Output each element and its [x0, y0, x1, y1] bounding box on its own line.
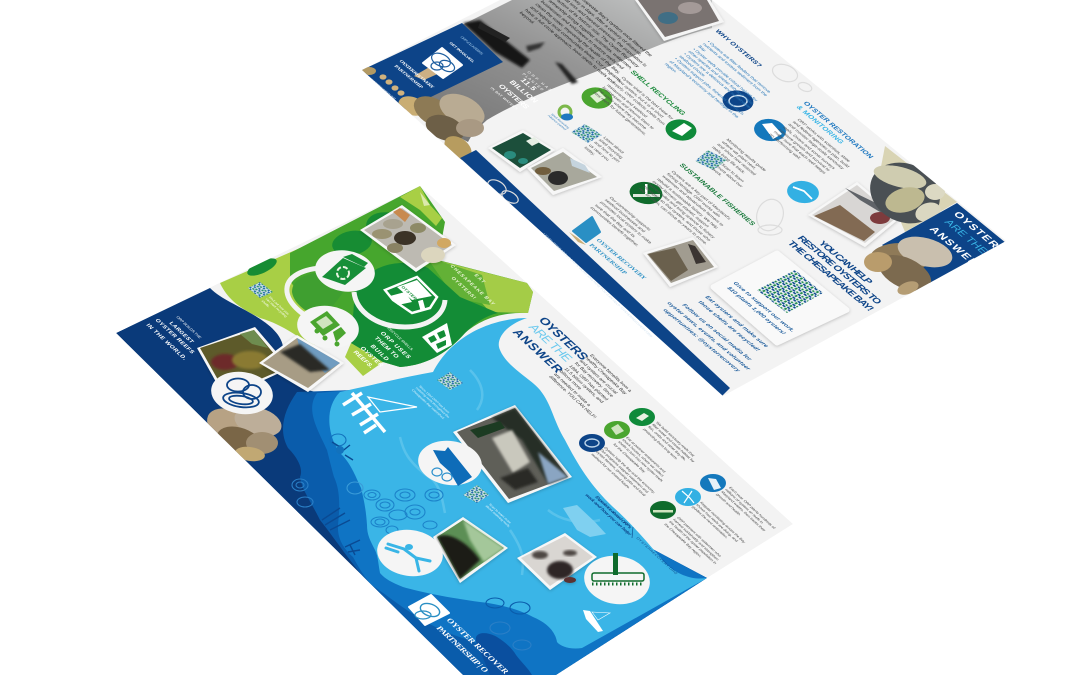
ghost boat silhouette	[563, 505, 606, 537]
icon: shop: OYSTERS	[400, 285, 421, 302]
photo: fishermen	[643, 237, 718, 287]
caption: recycle shells: OYSTER	[358, 346, 385, 368]
dark green tree patches	[247, 212, 390, 276]
logo text on navy panel: OYSTER RECOVERY	[397, 60, 435, 90]
caption small near QR: Scan to learn more about restoring reefs.	[484, 503, 512, 528]
navy panel left	[362, 23, 503, 110]
small info circles	[579, 408, 726, 519]
body text: intro left brochure: for Bay recovery. Since	[573, 362, 614, 398]
why oysters bullets	[664, 40, 772, 118]
QR shell recycling	[571, 124, 602, 143]
dark green circle region	[351, 263, 498, 367]
caption: eat oysters: CHESAPEAKE BAY	[448, 264, 497, 307]
white boat silhouette	[583, 610, 610, 632]
icon: boat blue circle	[754, 118, 786, 142]
heading: you can help: THE CHESAPEAKE BAY!	[785, 240, 876, 313]
lime land	[220, 248, 315, 345]
cover title	[927, 210, 1008, 268]
call to action text: $10 plants 1,000 oysters!	[725, 286, 787, 336]
body text: intro left brochure: Everyone benefits from a	[588, 354, 632, 393]
logo text on navy panel: oysterrecovery.org	[369, 78, 397, 100]
planted stat: OYSTERS	[496, 83, 531, 110]
title: oysters are the answer: ANSWER	[509, 327, 566, 375]
circle: truck	[294, 302, 362, 352]
lime and pale corner shapes	[400, 186, 533, 313]
caption: recycle shells: RECYCLE SHELLS.	[386, 327, 415, 351]
heading: you can help: YOU CAN HELP	[816, 240, 875, 286]
photo: work boat	[453, 405, 572, 503]
body text: aquaculture: Oysters help the Bay and the economy. Our programs support watermen and oyster farmers, growing jobs and local seafood for our shared future.	[591, 446, 657, 497]
caption small on lime: Find out how you can start recycling shells.	[261, 296, 290, 318]
body text: restaurants: Eat at partner restaurants and shuck houses, where we collect shells to turn into new oyster reefs for the Chesapeake Bay.	[613, 436, 667, 482]
body text: intro left brochure	[547, 354, 632, 419]
call to action text: Follow us on social media for	[680, 303, 753, 362]
fisheries QR caption: Scan to learn more about our work.	[711, 163, 745, 188]
fisheries text: Oysters are a key part of Maryland's fishing heritage. ORP works with watermen and aquaculture farmers to rebuild a sustainable fishery. We help oyster farmers get started, support harvest rules and bring science to fishery managers so that oysters, and those who rely on them, can thrive for years to come.	[637, 170, 732, 245]
shell recycling logo	[559, 106, 573, 120]
body text: intro left brochure: are needed to make a	[552, 373, 591, 407]
photo: shell pile	[808, 182, 900, 247]
photo: shell planting machine	[259, 335, 344, 392]
circle: diver	[374, 526, 446, 580]
blue layer	[312, 390, 707, 675]
photo: diver under water	[433, 517, 508, 583]
mid blue layer	[283, 390, 707, 675]
green land	[290, 186, 533, 367]
oyster pile on cover	[864, 236, 952, 295]
oyster line drawings	[292, 434, 531, 650]
call to action text: Give to support our work.	[731, 281, 796, 333]
body text: divers: Regular monitoring across the Bay shows how reefs are doing, and guides the next restoration.	[691, 501, 747, 544]
title: oysters are the answer: ARE THE	[525, 322, 576, 364]
body text: intro left brochure: 1994, ORP has planted	[568, 365, 609, 401]
photo: oyster platter	[360, 205, 456, 272]
lime patch bottom of green	[345, 343, 383, 376]
why oysters bullets: • Oysters are filter feeders that remove nutrients and excess sediment from the Bay.	[697, 40, 772, 97]
logo text on navy panel: PARTNERSHIP	[392, 65, 423, 89]
body text: intro left brochure: difference. YOU CAN HELP!	[547, 376, 596, 419]
heading: you can help: RESTORE OYSTERS TO	[795, 235, 884, 306]
heading: sustainable fisheries: SUSTAINABLE FISHERIES	[677, 163, 756, 227]
dark lobe bottom	[476, 633, 532, 675]
icon: truck circle	[582, 87, 612, 109]
planted stat: BILLION	[507, 79, 540, 104]
circle: rake	[581, 552, 653, 608]
photo: reef	[197, 327, 290, 398]
planted stat	[489, 71, 553, 111]
circle: recycling bin	[312, 247, 378, 295]
heading: why oysters: WHY OYSTERS?	[713, 29, 763, 68]
caption: recycle shells: BUILD	[368, 344, 391, 362]
logo text at fold: OYSTER RECOVERY	[594, 238, 648, 281]
ring arc left	[284, 266, 316, 316]
body text: intro left brochure: billions more	[557, 370, 581, 391]
caption: recycle shells: REEFS.	[351, 350, 375, 369]
get involved: GET INVOLVED.	[448, 41, 476, 63]
call to action text: oyster news, events, and volunteer	[665, 301, 752, 372]
icon: rake circle	[630, 182, 662, 204]
photo: green tanks	[488, 130, 555, 172]
body text: intro left brochure: 11.5 billion oysters, and	[562, 367, 604, 404]
restoration lower text: Monitoring results guide where we plant next, and show how restored reefs bring life back.	[711, 138, 767, 176]
navy cover panel	[882, 203, 1006, 283]
divider at url	[632, 527, 633, 538]
cover title: ARE THE	[942, 218, 990, 255]
caption: largest oyster reefs: IN THE WORLD.	[144, 323, 188, 361]
caption: recycle shells: ORP USES	[378, 331, 412, 360]
contact callout: Experience aboard ORP's	[594, 495, 633, 530]
icon: shop	[385, 277, 437, 313]
caption: eat oysters: OYSTERS!	[449, 276, 477, 300]
icon: oyster navy circle	[722, 90, 754, 112]
QR card	[713, 253, 847, 343]
body text: sanctuary reefs: We build sanctuary reefs that filter water and create habitat for fish, crabs and other Bay life, protecting them long term.	[643, 421, 696, 463]
why oysters bullets: • Oysters are a delicious and sustainable seafood choice.	[678, 52, 752, 109]
faint oyster outlines	[485, 61, 813, 235]
left brochure: outside panels	[116, 186, 793, 675]
strip text: LEARN MORE ABOUT ORP'S WORK AND HOW YOU CAN HELP: OYSTERRECOVERY.ORG	[542, 233, 654, 338]
logo text on navy panel	[369, 60, 435, 100]
photo: shells thrown from boat	[517, 533, 597, 590]
photo top oysters	[635, 0, 724, 41]
photo: oysters on plate	[870, 146, 957, 232]
planted stat: ORP HAS	[526, 71, 553, 92]
contact callout: work and how you can help!	[584, 493, 633, 536]
body text: intro left brochure: healthy Chesapeake Bay	[583, 357, 627, 396]
shell recycling text: Oyster shell is the best base for new oysters, but it is in short supply. ORP collects shells from restaurants and seafood businesses and returns them to the water where they become new reefs for future generations.	[592, 76, 675, 136]
logo tile	[423, 48, 462, 78]
grey photo panel with boats	[404, 0, 712, 142]
restoration text: ORP works with scientists, state and federal agencies to plan, build and monitor large-scale sanctuary reefs. Divers and sonar surveys measure growth and survival to make sure that each reef keeps on performing well.	[768, 118, 851, 174]
fisheries lower text: Our partnership supports seafood businesses and promotes local oysters to make sure that the Bay and its communities benefit together.	[589, 196, 653, 247]
body text: fisheries: ORP partners with watermen who harvest sustainably and strengthen the health of the oyster population in the Chesapeake Bay region.	[664, 516, 723, 565]
caption: largest oyster reefs: LARGEST	[167, 321, 195, 345]
right brochure: inside panels	[362, 0, 1006, 396]
water ripple lines	[400, 370, 600, 575]
icon: bin circle	[666, 119, 696, 141]
caption: largest oyster reefs: OYSTER REEFS	[153, 318, 195, 355]
caption: recycle shells	[351, 327, 415, 369]
photo: volunteers	[527, 148, 602, 195]
QR codes on left brochure	[248, 282, 489, 503]
title: oysters are the answer: OYSTERS	[535, 315, 591, 362]
cover title: ANSWER	[927, 225, 981, 268]
logo caption: Shell Recycling Alliance partner	[547, 113, 570, 131]
ring around shop	[354, 292, 445, 327]
body text: intro left brochure: and oysters are crucial	[578, 359, 618, 395]
icon: diver circle	[787, 180, 819, 204]
why oysters bullets: • Oyster reefs provide critical habitat for other species and shelter fish and crabs.	[687, 47, 759, 106]
call to action text	[661, 281, 796, 374]
logo bottom fold	[569, 217, 600, 245]
oyster pile	[202, 402, 285, 469]
caption: largest oyster reefs	[144, 316, 202, 361]
why oysters bullets: • Oysters support jobs, fisheries and much of Maryland's economy and heritage in the region.	[664, 57, 745, 118]
planted stat: IN BAY WATERS	[489, 87, 519, 111]
logo text bottom: PARTNERSHIP | O	[434, 625, 490, 674]
call to action text: those shells are recycled!	[696, 300, 761, 352]
oyster cluster lower left of right brochure	[398, 94, 484, 160]
body text: monitoring: Each year, ORP plants hundreds of millions of oysters on reefs in Maryland waters, then tracks their growth and health.	[716, 486, 777, 532]
url: OYSTERRECOVERY.ORG	[635, 537, 678, 575]
dock illustration	[343, 393, 417, 433]
icon: building	[422, 323, 452, 353]
heading: shell recycling: SHELL RECYCLING	[628, 70, 686, 116]
caption: recycle shells: THEM TO	[372, 336, 400, 359]
heading: oyster restoration: & MONITORING	[794, 105, 845, 145]
call to action text: opportunities: @oysterrecovery	[661, 308, 742, 374]
title: oysters are the answer	[509, 315, 591, 375]
shell recycling small text: Learn about shell recycling and how to join us near you today.	[583, 136, 625, 163]
left brochure titles	[144, 264, 678, 675]
planted stat: PLANTED	[521, 73, 545, 91]
caption: eat oysters: EAT	[472, 273, 486, 284]
navy strip at bottom edge	[460, 150, 730, 396]
QR fisheries	[695, 150, 727, 170]
heading: oyster restoration: OYSTER RESTORATION	[801, 101, 874, 160]
cover title: OYSTERS	[951, 210, 1008, 255]
light blue water	[329, 318, 707, 649]
circle: oyster logo	[208, 368, 276, 418]
logo tile bottom	[409, 595, 449, 625]
get involved	[448, 36, 484, 63]
get involved: ORP VOLUNTEERS	[459, 36, 484, 56]
navy reef panel	[116, 288, 707, 675]
logo text at fold: PARTNERSHIP	[587, 243, 628, 276]
circle: boat	[415, 437, 485, 489]
call to action text: Eat oysters and make sure	[703, 295, 769, 348]
planted stat: 11.5	[518, 77, 539, 92]
logo text bottom: OYSTER RECOVER	[444, 617, 511, 675]
seaweed and crab	[322, 442, 360, 555]
caption: largest oyster reefs: ORP BUILDS THE	[175, 316, 202, 339]
right brochure headings	[369, 29, 1008, 374]
caption small near dock: Since 1994 ORP has been restoring reefs throughout the Chesapeake Bay watershed.	[411, 385, 451, 420]
